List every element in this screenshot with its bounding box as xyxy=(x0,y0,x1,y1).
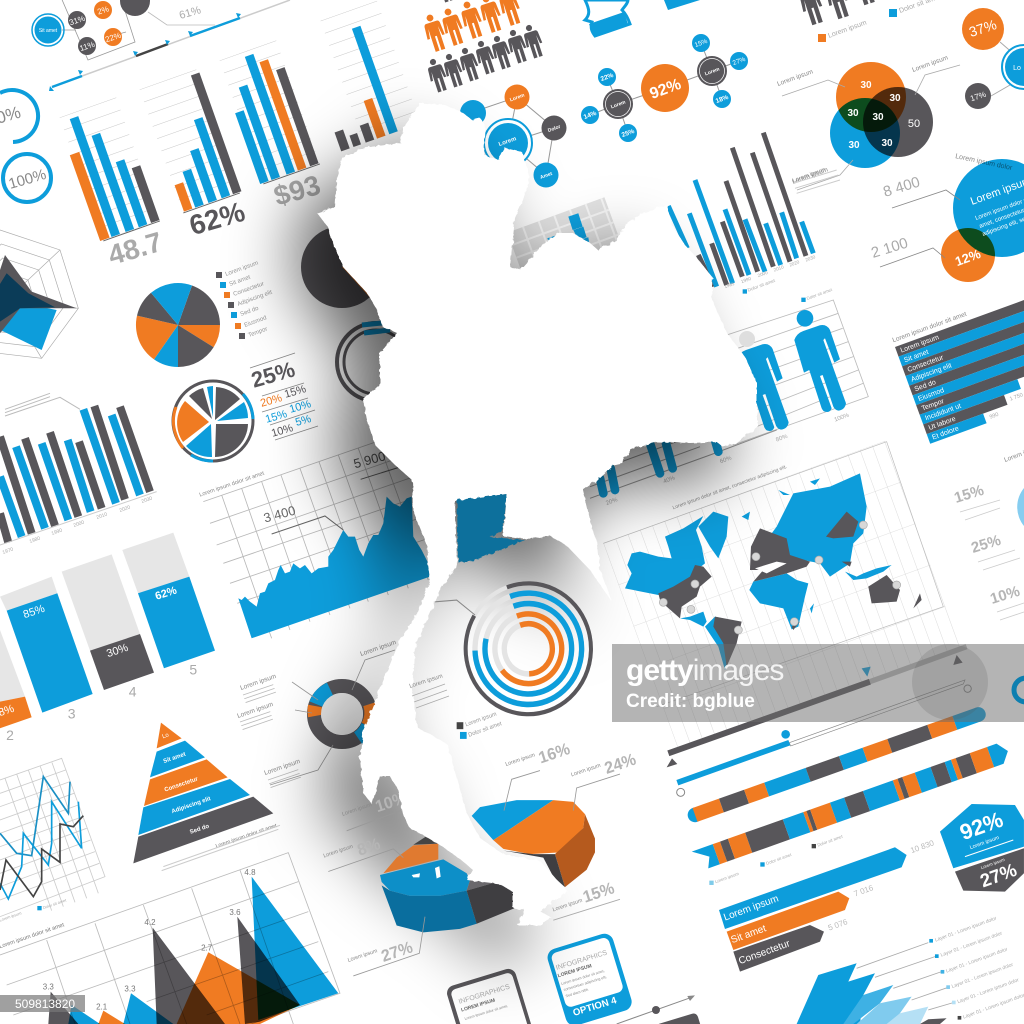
blue icon top xyxy=(585,0,700,36)
triangle chart: 3.3 xyxy=(124,985,136,994)
bubble network: Lorem xyxy=(704,66,721,77)
venn callouts: Lorem ipsum xyxy=(776,68,814,88)
labels on map side cards: Lorem ipsum xyxy=(409,673,444,690)
pie legend: Consectetur xyxy=(233,281,265,298)
3D pie upper: Lorem ipsum xyxy=(570,763,602,778)
venn callouts: Lorem ipsum xyxy=(791,166,829,186)
image id tag xyxy=(0,995,85,1012)
bar chart axis years: 1990 xyxy=(51,528,63,537)
horizontal bar panel: Consectetur xyxy=(907,354,945,374)
3D pie lower xyxy=(323,788,515,976)
world map chart: Lorem ipsum dolor sit amet, consectetur adipiscing elit. xyxy=(672,464,788,511)
percentage table: 5% xyxy=(294,413,313,429)
world map chart xyxy=(603,441,960,750)
triangle chart: 2.1 xyxy=(96,1002,108,1011)
percentage table xyxy=(248,353,318,440)
triangle chart xyxy=(0,853,340,1024)
option cards: Lorem ipsum dolor sit amet, xyxy=(561,969,605,986)
percent chart fragment: 20% xyxy=(605,497,619,507)
bar chart axis years: 1980 xyxy=(29,536,41,545)
3D pie upper: 15% xyxy=(581,879,617,907)
network diagram top left: Sit amet xyxy=(39,28,58,34)
bubble network: 15% xyxy=(694,38,709,49)
venn diagram: 30 xyxy=(881,138,893,149)
orange bubble 37%: 37% xyxy=(967,16,998,40)
bar chart 48.7 xyxy=(57,97,160,242)
people pictogram xyxy=(420,0,546,94)
pie chart xyxy=(136,283,220,367)
lower right slider and stripes: 10 830 xyxy=(909,838,936,855)
percent chart fragment: 60% xyxy=(719,455,733,465)
line chart: Dolor sit amet xyxy=(42,897,68,910)
option cards: INFOGRAPHICS xyxy=(555,950,608,972)
pie legend: Sed do xyxy=(240,306,260,318)
bar chart axis years xyxy=(2,496,153,556)
image id tag: 509813820 xyxy=(15,997,75,1011)
value 62%: 62% xyxy=(186,196,248,241)
bar chart left xyxy=(0,393,157,545)
network diagram top left: 31% xyxy=(68,14,86,27)
horizontal bar panel: Et dolore xyxy=(931,425,960,441)
option cards: LOREM IPSUM xyxy=(460,998,496,1014)
horizontal bar panel: Lorem ipsum dolor sit amet xyxy=(892,311,968,344)
venn diagram xyxy=(830,62,933,168)
bar chart axis years: 2020 xyxy=(119,505,131,514)
Thailand map white silhouette xyxy=(317,103,757,925)
horizontal bar panel: Sit amet xyxy=(903,349,930,364)
pie legend: Eiusmod xyxy=(244,315,268,329)
option cards: Lorem ipsum dolor sit amet, xyxy=(464,1004,508,1021)
horizontal bar panel: Lorem ipsum xyxy=(900,334,940,355)
donut labels: Lorem ipsum xyxy=(239,673,277,692)
people bar chart: Dolor sit amet xyxy=(806,287,833,301)
percentage table: 10% xyxy=(270,422,295,440)
percentage table: 15% xyxy=(264,408,289,426)
teal gulf fragment xyxy=(457,494,525,562)
option cards: INFOGRAPHICS xyxy=(458,984,511,1006)
blue network: Dolor xyxy=(547,124,562,134)
watermark banner xyxy=(612,644,1024,722)
donut labels: Lorem ipsum xyxy=(263,758,301,777)
network diagram top left: 22% xyxy=(104,31,122,44)
venn diagram: 50 xyxy=(908,118,920,130)
lower right slider and stripes: Lorem ipsum xyxy=(980,857,1006,870)
horizontal bar panel: 1 750 xyxy=(1009,392,1024,403)
3D pie upper: Lorem ipsum xyxy=(505,752,536,768)
option cards: Sed diam nibh. xyxy=(565,987,590,998)
pie legend: Adipiscing elit xyxy=(237,290,273,308)
3D pie lower: 10% xyxy=(373,788,409,816)
triangle chart: 4.8 xyxy=(244,868,256,877)
pie legend: Tempor xyxy=(248,326,268,339)
lower right slider and stripes: 27% xyxy=(977,859,1020,891)
stacked columns: 30% xyxy=(105,642,130,660)
donut labels: Lorem ipsum xyxy=(236,701,274,720)
bar chart top xyxy=(298,1,420,151)
stat callouts 8400 and 2100: 8 400 xyxy=(881,174,922,201)
layered area chart bottom right: Layer 01 - Lorem ipsum dolor xyxy=(934,915,998,944)
triangle chart: 4.2 xyxy=(144,918,156,927)
3D pie upper: Lorem ipsum xyxy=(552,898,584,913)
lower right slider and stripes: Dolor sit amet xyxy=(765,852,793,866)
venn callouts: Lorem ipsum xyxy=(911,54,949,74)
stacked columns: 4 xyxy=(129,684,137,700)
pyramid: Lorem ipsum dolor sit amet xyxy=(215,823,278,850)
bubble network: 22% xyxy=(600,72,615,83)
lower right slider and stripes: 92% xyxy=(956,807,1006,845)
value $93: $93 xyxy=(270,169,324,212)
blue network: Amet xyxy=(539,171,554,181)
vertical bars chart right: 2030 xyxy=(805,254,816,263)
pyramid xyxy=(133,723,280,871)
right stat list: 15% xyxy=(952,482,986,507)
network diagram top left: 11% xyxy=(78,40,96,53)
blue network xyxy=(460,84,566,188)
horizontal bar panel: Sed do xyxy=(914,379,937,393)
percentage table: 10% xyxy=(288,398,313,416)
venn diagram: 30 xyxy=(847,108,859,119)
line chart xyxy=(0,758,105,923)
pie legend xyxy=(216,260,273,339)
pyramid: Adipiscing elit xyxy=(171,796,212,815)
percent chart fragment: 40% xyxy=(663,475,677,485)
3D pie lower: Lorem ipsum xyxy=(323,844,354,860)
option cards: LOREM IPSUM xyxy=(557,963,593,979)
horizontal bar panel: Tempor xyxy=(921,398,946,413)
small grid chart xyxy=(507,197,623,283)
network diagram top left xyxy=(32,0,215,60)
3D pie lower: Lorem ipsum xyxy=(341,802,373,818)
lower right slider and stripes xyxy=(667,647,1024,972)
3D pie lower: Lorem ipsum xyxy=(347,948,379,964)
area chart xyxy=(199,427,433,638)
vertical bars chart right xyxy=(668,133,840,294)
ring chart in gulf xyxy=(435,565,609,739)
horizontal bar panel: Ut labore xyxy=(928,416,957,432)
people top right xyxy=(795,0,941,42)
bubble network: 25% xyxy=(621,128,636,139)
stacked columns: 62% xyxy=(154,584,179,603)
layered area chart bottom right: Layer 01 - Lorem ipsum dolor xyxy=(945,946,1009,975)
area chart: 5 900 xyxy=(352,448,387,471)
venn diagram: 30 xyxy=(848,140,860,151)
horizontal bar panel: Adipiscing elit xyxy=(910,362,953,384)
pyramid: Consectetur xyxy=(164,776,199,794)
network diagram top left: 61% xyxy=(178,4,203,22)
percentage table: 25% xyxy=(248,357,298,393)
lower right slider and stripes: Lorem ipsum xyxy=(969,835,1001,851)
pie legend: Sit amet xyxy=(229,275,252,288)
big blue bubble and 12%: 12% xyxy=(953,246,983,269)
right stat list: 25% xyxy=(969,532,1003,557)
option cards: OPTION 4 xyxy=(572,995,619,1019)
3D pie lower: 27% xyxy=(379,938,415,966)
stat callouts 8400 and 2100: 2 100 xyxy=(869,235,910,262)
donut labels xyxy=(236,639,397,788)
bar chart axis years: 2000 xyxy=(73,520,85,529)
ring 100% xyxy=(3,154,51,202)
area chart: Lorem ipsum dolor sit amet xyxy=(199,471,266,499)
lower right slider and stripes: Lorem ipsum xyxy=(722,893,780,923)
labels on map side cards xyxy=(409,673,449,708)
option cards xyxy=(445,931,701,1024)
bar chart axis years: 2030 xyxy=(141,496,153,505)
timeline slider top left xyxy=(49,0,290,91)
people bar chart xyxy=(717,287,868,445)
3D pie upper xyxy=(472,740,639,920)
bar chart 62% xyxy=(140,69,242,213)
people bar chart: 80% xyxy=(775,434,789,444)
pyramid: Sed do xyxy=(189,824,210,836)
stacked columns xyxy=(0,533,215,743)
bubble network: 92% xyxy=(648,76,683,103)
people bar chart: 100% xyxy=(834,412,851,424)
venn diagram: 30 xyxy=(889,93,901,104)
watermark banner: Credit: bgblue xyxy=(626,691,755,712)
bubble network: 14% xyxy=(583,110,598,121)
orange bubble 37%: Lo xyxy=(1013,65,1021,72)
layered area chart bottom right: Layer 01 - Lorem ipsum dolor xyxy=(951,962,1014,990)
big blue bubble and 12%: Lorem ipsum dolor xyxy=(955,153,1013,172)
bubble network: Lorem xyxy=(610,99,627,110)
layered area chart bottom right: Layer 01 - Lorem ipsum dolor xyxy=(940,930,1003,959)
orange bubble 37% xyxy=(962,8,1024,109)
option cards: consectetuer adipiscing elit, xyxy=(563,975,607,992)
big dark pie cut by map xyxy=(301,226,385,308)
horizontal bar panel: 990 xyxy=(989,412,1000,421)
vertical bars chart right: 1990 xyxy=(740,276,752,284)
horizontal bar panel: Incididunt ut xyxy=(924,403,962,422)
vertical bars chart right: 2000 xyxy=(757,270,769,278)
lower right slider and stripes: Lorem ipsum xyxy=(714,871,740,884)
donut chart xyxy=(270,650,395,785)
radar chart xyxy=(0,230,78,358)
venn callouts xyxy=(776,54,960,190)
orange bubble 37%: 17% xyxy=(969,90,987,103)
triangle chart: 3.3 xyxy=(43,982,54,991)
blue network: Lorem xyxy=(498,136,517,148)
right stat list: 10% xyxy=(988,583,1022,608)
big blue bubble and 12% xyxy=(941,153,1024,282)
watermark banner: gettyimages xyxy=(626,654,783,687)
stat callouts 8400 and 2100 xyxy=(869,174,960,267)
triangle chart: Lorem ipsum dolor sit amet xyxy=(0,922,66,950)
area chart: 3 400 xyxy=(262,503,297,526)
percentage table: 20% xyxy=(259,392,284,410)
horizontal bar panel: Eiusmod xyxy=(917,387,945,403)
bubble network: 18% xyxy=(715,94,730,105)
value 48.7: 48.7 xyxy=(105,226,166,271)
vertical bars chart right: 2020 xyxy=(789,259,800,268)
3D pie upper: 24% xyxy=(602,750,639,778)
percentage table: 15% xyxy=(283,383,308,401)
triangle chart: 2.7 xyxy=(201,944,213,953)
bubble network: 27% xyxy=(732,56,747,67)
lower right slider and stripes: 5 076 xyxy=(827,917,849,933)
3D pie lower: 8% xyxy=(355,835,383,860)
ring chart in gulf: Lorem ipsum xyxy=(465,711,498,728)
vertical bars chart right: 2010 xyxy=(773,264,785,273)
horizontal bar panel xyxy=(892,283,1024,444)
lower right slider and stripes: 7 016 xyxy=(853,883,875,899)
layered area chart bottom right: Layer 01 - Lorem ipsum dolor xyxy=(957,977,1020,1005)
lower right slider and stripes: Dolor sit amet xyxy=(817,833,844,848)
lower right slider and stripes: Consectetur xyxy=(737,938,792,967)
3D pie upper: 16% xyxy=(536,740,573,768)
lower right slider and stripes: Sit amet xyxy=(730,923,768,946)
ring 100%: 100% xyxy=(7,166,48,193)
pale figure head xyxy=(739,331,755,347)
ring chart in gulf: Dolor sit amet xyxy=(468,721,503,739)
blue network: Lorem xyxy=(509,92,526,103)
stacked columns: 2 xyxy=(6,727,14,743)
pyramid: Sit amet xyxy=(163,752,187,765)
ring 0% xyxy=(0,90,38,142)
network diagram top left: 2% xyxy=(96,4,110,17)
bar chart axis years: 1970 xyxy=(2,547,14,556)
donut labels: Lorem ipsum xyxy=(359,639,397,658)
stacked columns: 3 xyxy=(68,705,76,721)
venn diagram: 30 xyxy=(860,80,872,91)
stacked columns: 5 xyxy=(189,661,197,677)
percent chart fragment xyxy=(590,430,777,507)
vertical bars chart right: Lorem ipsum xyxy=(792,167,827,185)
vertical bars chart right: 1985 xyxy=(724,281,735,289)
venn diagram: 30 xyxy=(872,112,884,123)
vertical bars chart right: Dolor sit amet xyxy=(747,278,776,293)
exploded pie xyxy=(173,381,253,461)
people top right: Lorem ipsum xyxy=(827,19,868,40)
bar chart axis years: 2010 xyxy=(96,512,108,521)
bar chart $93 xyxy=(217,40,320,185)
pyramid: Lo xyxy=(162,732,170,740)
pie legend: Lorem ipsum xyxy=(225,260,259,278)
stacked columns: 85% xyxy=(22,603,47,621)
layered area chart bottom right xyxy=(797,915,1024,1024)
right stat list xyxy=(952,444,1024,620)
triangle chart: 3.6 xyxy=(229,908,241,917)
ring arcs cut by map xyxy=(337,322,415,401)
map shadow xyxy=(285,141,725,963)
bubble network xyxy=(581,34,748,142)
